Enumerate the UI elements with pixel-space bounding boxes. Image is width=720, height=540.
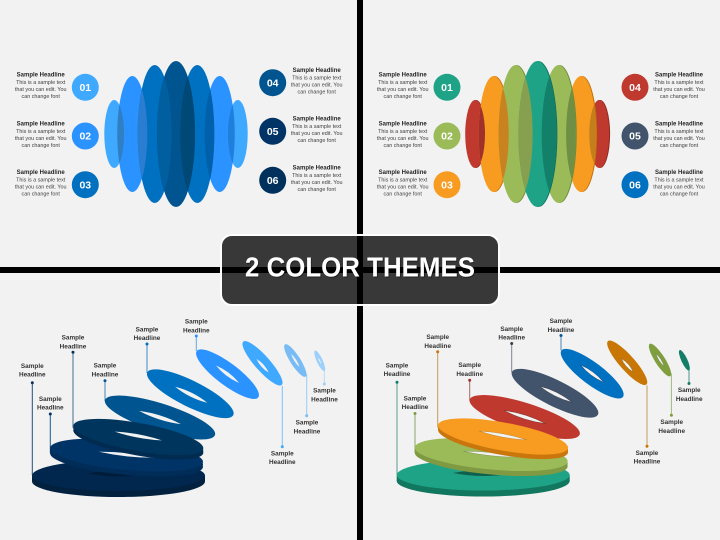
item 04 text: that you can edit. You (291, 82, 342, 88)
item 02 text: can change font (384, 143, 422, 149)
ring labels: Headline (676, 396, 703, 403)
ring 1 base (397, 460, 570, 496)
ring labels: Sample (296, 420, 319, 427)
ring labels: Sample (426, 334, 450, 341)
panel: blue theme exploded rings (19, 318, 338, 497)
item 04 text: Sample Headline (293, 68, 341, 74)
badge 04 (622, 74, 648, 101)
item 05 text: that you can edit. You (291, 131, 342, 137)
badge 04: 04 (267, 77, 279, 89)
item 02 text: Sample Headline (17, 121, 65, 127)
item 04 text (653, 73, 705, 100)
ring 2 (49, 433, 204, 482)
ring 3 (71, 412, 206, 467)
badge 06 (259, 167, 286, 194)
item 03 text: that you can edit. You (15, 184, 66, 190)
ring labels: Sample (458, 362, 482, 369)
item 03 text: This is a sample text (16, 178, 66, 184)
ring labels: Headline (92, 371, 119, 378)
item 03 text: can change font (384, 192, 422, 198)
item 01 text: that you can edit. You (377, 87, 428, 93)
item 05 text: Sample Headline (293, 117, 341, 123)
item 06 text: that you can edit. You (653, 184, 705, 190)
item 04 text: This is a sample text (654, 80, 704, 86)
item 04 text: can change font (298, 90, 336, 96)
item 06 text: that you can edit. You (291, 180, 342, 186)
ring 5 (506, 360, 604, 426)
item 06 text: Sample Headline (655, 170, 704, 176)
ring 6 (555, 342, 630, 406)
ring labels: Sample (21, 363, 44, 370)
ring labels: Sample (185, 318, 208, 325)
ring labels: Headline (402, 404, 429, 411)
ring labels: Headline (294, 428, 321, 435)
ring labels: Headline (498, 334, 525, 342)
item 02 text: This is a sample text (378, 129, 428, 135)
ring 2 (413, 432, 569, 482)
ring labels: Headline (19, 372, 46, 379)
item 01 text: that you can edit. You (15, 87, 66, 93)
banner: 2 color themes: 2 COLOR THEMES (245, 252, 475, 283)
item 05 text: This is a sample text (654, 129, 704, 135)
item 02 text: This is a sample text (16, 129, 66, 135)
chart: blue layered ellipses (104, 61, 248, 207)
ring labels (384, 318, 703, 466)
item 03 text (377, 170, 428, 198)
item 01 text: can change font (22, 94, 60, 100)
item 05 text: Sample Headline (655, 121, 704, 127)
banner: 2 color themes (220, 234, 500, 306)
ring labels: Headline (456, 371, 483, 378)
item 01 text (377, 73, 428, 100)
item 06 text: can change font (298, 187, 336, 193)
badge 02: 02 (441, 131, 453, 143)
ring labels: Sample (39, 396, 62, 403)
badge 03: 03 (79, 179, 91, 191)
ring labels: Headline (60, 343, 87, 350)
ring 9 (312, 349, 327, 372)
item 03 text: Sample Headline (17, 170, 65, 176)
item 02 text (377, 121, 428, 149)
badge 04 (259, 69, 286, 96)
badge 02 (72, 122, 99, 150)
badge 06: 06 (267, 175, 279, 187)
item 01 text: This is a sample text (378, 80, 428, 86)
ring labels: Sample (271, 450, 294, 457)
badge 03 (72, 171, 99, 198)
ring labels: Headline (658, 428, 685, 435)
ring labels: Headline (311, 397, 338, 404)
ring labels (19, 318, 338, 466)
ring labels: Sample (660, 419, 684, 426)
item 05 text: that you can edit. You (653, 136, 705, 142)
leader lines and labels (396, 334, 690, 474)
ring labels: Headline (548, 327, 575, 334)
item 02 text (15, 121, 66, 149)
item 02 text: can change font (22, 143, 60, 149)
badge 04: 04 (629, 82, 641, 94)
item 04 text: that you can edit. You (653, 87, 705, 93)
item 05 text (291, 117, 342, 144)
item 01 text: This is a sample text (16, 80, 66, 86)
ring labels: Sample (404, 396, 427, 402)
item 04 text: This is a sample text (292, 76, 342, 82)
leader lines and labels (31, 334, 326, 475)
ring 6 (190, 342, 265, 406)
banner: 2 color themes: 2 COLOR THEMES (246, 253, 476, 284)
badge 02: 02 (79, 131, 91, 143)
item 06 text: can change font (660, 192, 699, 198)
item 05 text: This is a sample text (292, 124, 342, 130)
item 01 text (15, 73, 66, 100)
ring labels: Headline (634, 458, 661, 466)
item 01 text: Sample Headline (17, 73, 65, 79)
ring labels: Sample (136, 326, 159, 333)
ring 8 (281, 342, 310, 379)
ring 7 (602, 336, 652, 389)
item 04 text: can change font (660, 94, 699, 100)
ring labels: Sample (94, 363, 117, 370)
ring labels: Headline (183, 327, 210, 334)
item 02 text: that you can edit. You (15, 136, 66, 142)
panel: multicolor theme spheres (377, 61, 705, 207)
ring labels: Sample (313, 388, 336, 395)
item 06 text: This is a sample text (654, 178, 704, 184)
item 06 text (653, 170, 705, 198)
badge 06: 06 (629, 179, 641, 191)
badge 05 (259, 118, 286, 145)
badge 01: 01 (441, 82, 453, 94)
item 02 text: that you can edit. You (377, 136, 428, 142)
badge 01 (72, 74, 99, 101)
item 01 text: Sample Headline (379, 73, 427, 79)
ring 8 (645, 341, 675, 379)
badge 05: 05 (267, 126, 279, 138)
ring labels: Sample (500, 326, 524, 333)
chart: multicolor layered ellipses (465, 61, 610, 207)
badge 01: 01 (79, 82, 91, 94)
ring 9 (677, 349, 692, 372)
item 01 text: can change font (384, 94, 422, 100)
panel: multicolor theme exploded rings (384, 318, 703, 496)
ring 3 (436, 411, 570, 466)
ring labels: Sample (386, 362, 409, 370)
item 03 text: that you can edit. You (377, 184, 428, 190)
ring labels: Sample (550, 318, 573, 325)
item 03 text: can change font (22, 192, 60, 198)
ring labels: Headline (37, 405, 64, 412)
ring labels: Sample (636, 450, 659, 457)
ring 4 (465, 386, 584, 448)
ring labels: Headline (269, 459, 296, 466)
ring 4 (101, 387, 219, 448)
badge 05 (622, 122, 648, 150)
badge 05: 05 (629, 131, 641, 143)
panel: blue theme spheres (15, 61, 342, 207)
ring labels: Sample (678, 387, 701, 394)
badge 06 (622, 171, 648, 198)
item 03 text: This is a sample text (378, 178, 428, 184)
item 06 text (291, 166, 342, 193)
ring 7 (238, 337, 287, 390)
ring labels: Headline (134, 335, 161, 342)
ring labels: Headline (384, 371, 411, 378)
item 04 text (291, 68, 342, 96)
item 04 text: Sample Headline (655, 73, 704, 79)
ring 5 (142, 361, 239, 427)
badge 02 (434, 122, 460, 150)
item 05 text: can change font (298, 138, 336, 144)
badge 03 (434, 171, 460, 198)
item 05 text: can change font (660, 143, 699, 149)
ring labels: Sample (62, 335, 85, 342)
item 06 text: Sample Headline (293, 166, 341, 172)
item 02 text: Sample Headline (379, 121, 427, 127)
item 06 text: This is a sample text (292, 173, 342, 179)
ring labels: Headline (424, 343, 451, 350)
item 03 text: Sample Headline (379, 170, 427, 176)
badge 01 (434, 74, 460, 101)
badge 03: 03 (441, 179, 453, 191)
item 05 text (653, 121, 705, 149)
ring 1 base (32, 460, 205, 497)
item 03 text (15, 170, 66, 198)
